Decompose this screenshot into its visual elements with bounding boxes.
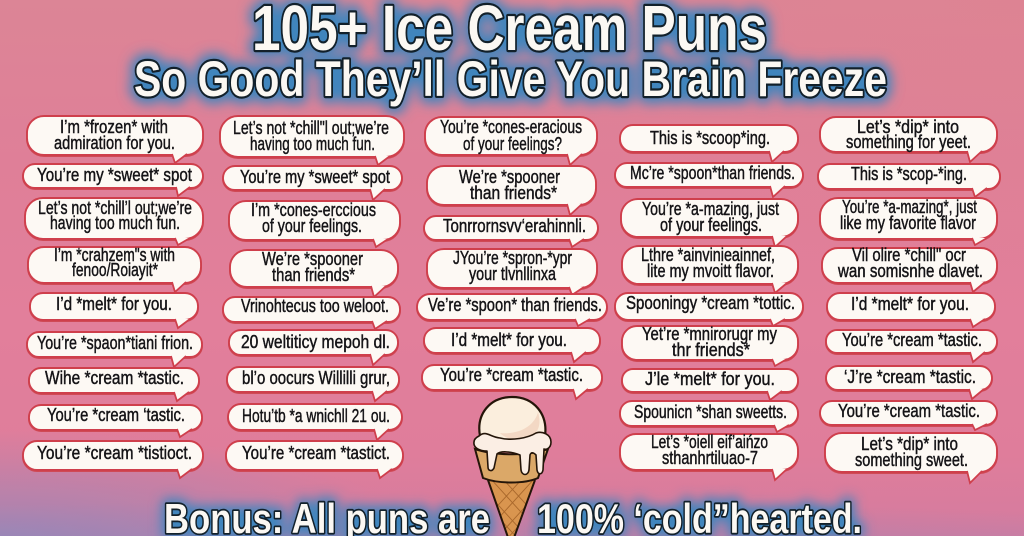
bonus line <box>164 495 862 536</box>
bubble: I’m *cones-erccious <box>251 200 376 220</box>
bubble: admiration for you. <box>54 133 175 153</box>
bubble <box>23 164 203 196</box>
bubble <box>27 332 202 367</box>
bubble: You’re *cream ‘tastic. <box>47 405 185 425</box>
bubble <box>229 330 398 365</box>
bubble: You’re *cream *tastict. <box>242 443 390 463</box>
bubble: You’re *a-mazing*, just <box>842 197 977 217</box>
bubble <box>820 117 997 162</box>
bubble: Spounicn *shan sweetts. <box>634 402 787 422</box>
bubble <box>620 432 798 480</box>
bubble: Yet’re *mnirorugr my <box>642 324 777 344</box>
column 4 of puns <box>615 125 803 480</box>
bubble: I’d *melt* for you. <box>851 294 969 314</box>
bubble: your tlvnllinxa <box>469 264 557 284</box>
icon: ice cream cone <box>474 397 551 536</box>
bubble: This is *scoop*ing. <box>650 128 770 148</box>
bubble: J’le *melt* for you. <box>645 369 775 389</box>
bubble <box>30 293 198 328</box>
column 2 of puns <box>220 116 404 478</box>
bubble: You’re *cream *tastic. <box>842 330 982 350</box>
bubble <box>820 197 997 245</box>
bubble: something sweet. <box>855 450 968 470</box>
bubble <box>427 248 597 295</box>
bubble: of your feelings? <box>463 134 562 154</box>
bubble <box>622 324 798 366</box>
bubble <box>27 116 203 163</box>
bubble <box>826 366 992 399</box>
bubble: You’re *cones-eracious <box>440 117 582 137</box>
bubble: than friends* <box>272 265 355 285</box>
bubble: Mc’re *spoon*than friends. <box>630 163 795 183</box>
bubble <box>25 198 203 245</box>
bubble <box>229 200 400 247</box>
bubble: This is *scop-*ing. <box>851 164 967 184</box>
bubble: You’re *a-mazing, just <box>642 199 779 219</box>
bubble: bl’o oocurs Willilli grur, <box>242 368 390 388</box>
bubble: Let’s *oiell eif’aińzo <box>651 432 768 452</box>
bubble <box>223 166 402 200</box>
bubble <box>227 367 399 401</box>
bubble: ‘J’re *cream *tastic. <box>844 367 976 387</box>
bubble: 20 weltiticy mepoh dl. <box>241 332 390 352</box>
bubble: thr friends* <box>672 340 750 360</box>
title <box>134 0 887 107</box>
bubble <box>226 441 403 478</box>
bubble: Spooningy *cream *tottic. <box>626 293 795 313</box>
bubble <box>825 433 997 483</box>
bubble: I’d *melt* for you. <box>451 330 567 350</box>
bubble <box>826 330 997 362</box>
bubble: sthanhrtiluao-7 <box>662 448 758 468</box>
bubble <box>822 245 997 292</box>
bubble: We’re *spooner <box>459 167 560 187</box>
bubble <box>422 365 602 399</box>
bubble: having too much fun. <box>250 134 375 154</box>
bubble: Ve’re *spoon* than friends. <box>428 295 602 315</box>
bubble <box>622 369 798 400</box>
bubble <box>28 245 201 292</box>
bubble <box>827 293 995 327</box>
bubble <box>223 296 400 329</box>
bubble: JYou’re *spron-*ypr <box>453 248 572 268</box>
bubble: Let’s not *chill"l out;we’re <box>233 118 389 138</box>
bubble <box>29 405 202 437</box>
bubble <box>615 293 803 326</box>
bubble <box>23 441 203 478</box>
bubble <box>417 294 607 326</box>
bubble: You’re *cream *tastic. <box>440 365 583 385</box>
bubble <box>820 401 997 430</box>
bubble: Let’s not *chill’l out;we’re <box>38 198 192 218</box>
scoop <box>479 397 545 444</box>
bubble: I’m *crahzem"s with <box>54 245 175 265</box>
bubble <box>615 163 803 197</box>
bubble: of your feelings. <box>660 215 762 235</box>
bubble <box>620 401 798 432</box>
bubble: fenoo/Roiayit* <box>72 260 158 280</box>
bubble <box>424 328 600 362</box>
bubble: You’re my *sweet* spot <box>240 167 390 187</box>
bubble: having too much fun. <box>50 213 180 233</box>
bubble <box>424 216 598 247</box>
bubble: Vil olire *chill" ocr <box>852 245 966 265</box>
column 5 of puns <box>818 117 1000 483</box>
bubble: than friends* <box>470 183 557 203</box>
melted cream drips <box>474 432 551 474</box>
waffle cone <box>487 480 536 536</box>
bubble: Tonrrornsvv‘erahinnli. <box>443 216 586 236</box>
bubble <box>425 117 597 165</box>
column 3 of puns <box>417 117 607 399</box>
cone rim <box>475 449 548 482</box>
bubble: Let’s *dip* into <box>857 117 959 137</box>
bubble <box>228 404 402 440</box>
bubble: You’re *spaon*tiani frion. <box>37 333 193 353</box>
bubble: Vrinohtecus too weloot. <box>241 296 389 316</box>
bubble <box>427 166 596 215</box>
bubble: lite my mvoitt flavor. <box>647 261 774 281</box>
bubble <box>29 368 199 401</box>
bubble: I’d *melt* for you. <box>56 294 172 314</box>
bubble: Let’s *dip* into <box>861 434 958 454</box>
column 1 of puns <box>23 116 203 478</box>
bubble: You’re *cream *tastic. <box>838 401 980 421</box>
bubble: wan somisnhe dlavet. <box>837 261 983 281</box>
bubble: We’re *spooner <box>262 249 363 269</box>
bubble <box>621 199 798 247</box>
bubble: I’m *frozen* with <box>60 117 168 137</box>
bubble: Wihe *cream *tastic. <box>45 368 184 388</box>
bubble: You’re my *sweet* spot <box>37 165 192 185</box>
bubble <box>230 249 398 297</box>
bubble <box>622 245 798 293</box>
bubble <box>220 116 404 165</box>
bubble: something for yeet. <box>846 132 971 152</box>
bubble <box>620 125 798 162</box>
bubble: You’re *cream *tistioct. <box>37 443 192 463</box>
bubble: Hotu’tb *a wnichll 21 ou. <box>242 406 390 426</box>
bubble: of your feelings. <box>262 216 362 236</box>
bubble: like my favorite flavor <box>840 213 976 233</box>
bubble: Lthre *ainvinieainnef, <box>641 245 775 265</box>
bubble <box>818 164 1000 197</box>
